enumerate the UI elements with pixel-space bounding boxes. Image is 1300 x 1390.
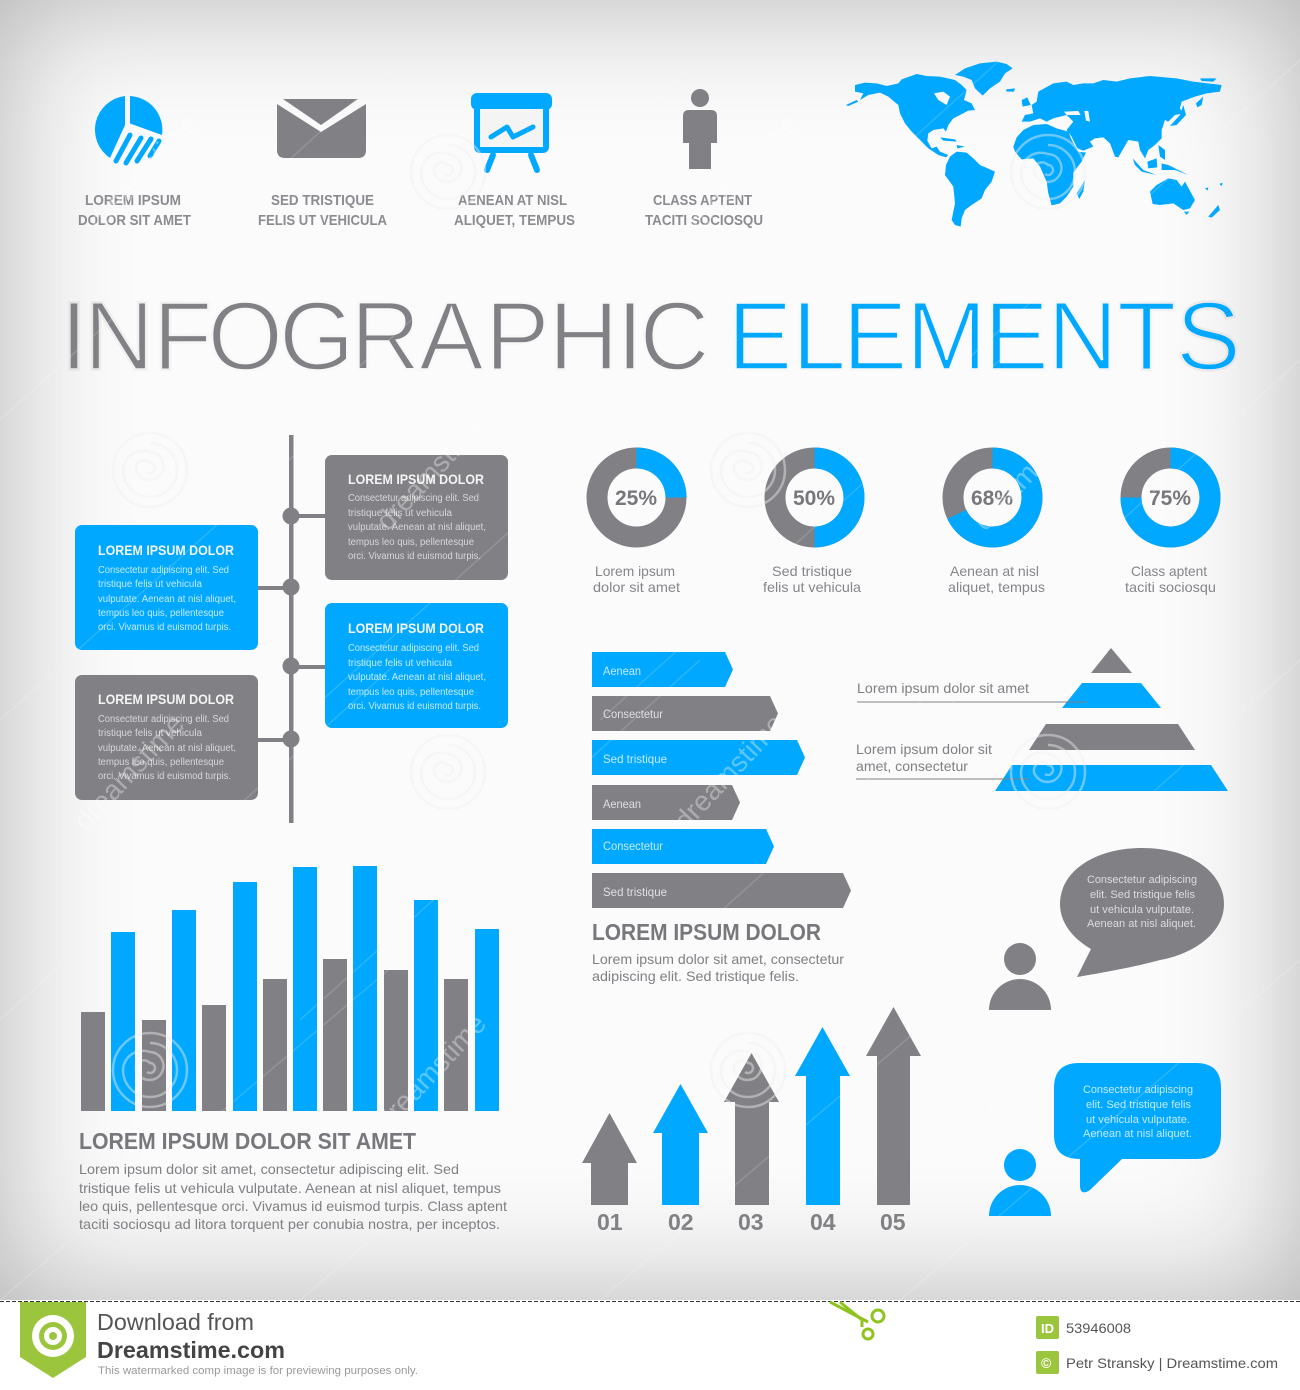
bar: consectetur blue [592, 829, 774, 864]
text: author credit: Petr Stransky | Dreamstime.com [1066, 1355, 1278, 1371]
icon row [78, 89, 763, 229]
text: dreamstime [668, 708, 790, 836]
text: dreamstime [370, 408, 492, 536]
label: aenean: AENEAN AT NISL [458, 192, 567, 209]
label: lorem ipsum: DOLOR SIT AMET [78, 212, 191, 229]
text: bar chart description [79, 1161, 507, 1232]
speech bubble blue [1054, 1063, 1221, 1192]
growth arrows [582, 1007, 921, 1235]
text: dreamstime [68, 708, 190, 836]
speech bubble gray: elit. Sed tristique felis [1090, 889, 1196, 901]
donut 25%: 25% [615, 487, 657, 510]
speech bubble blue: ut vehicula vulputate. [1086, 1114, 1190, 1126]
bar: consectetur gray [592, 696, 778, 731]
panel: blue box right: vulputate. Aenean at nisl aliquet, [348, 672, 486, 683]
footer download text [97, 1309, 418, 1377]
text: dreamstime [682, 108, 804, 236]
panel: gray box left: Consectetur adipiscing elit. Sed [98, 714, 229, 725]
text: bar chart description: Lorem ipsum dolor sit amet, consectetur adipiscing elit. Sed [79, 1161, 459, 1177]
arrow 04: 04 [810, 1209, 836, 1235]
label: lorem ipsum [78, 192, 191, 229]
text: dreamstime [82, 108, 204, 236]
bar: aenean gray [592, 785, 740, 820]
pyramid chart: amet, consectetur [856, 758, 968, 774]
panel: gray box top right: Consectetur adipiscing elit. Sed [348, 493, 479, 504]
arrow 03 [724, 1053, 779, 1235]
bar: consectetur blue: Consectetur [603, 839, 663, 853]
panel: gray box top right: orci. Vivamus id euismod turpis. [348, 551, 481, 562]
donut 25% [593, 448, 686, 595]
panel: blue box right: Consectetur adipiscing elit. Sed [348, 643, 479, 654]
panel: blue box left: LOREM IPSUM DOLOR [98, 542, 234, 558]
text: bar chart description: leo quis, pellentesque orci. Vivamus id euismod turpis. Class aptent [79, 1198, 507, 1214]
arrow 05 [866, 1007, 921, 1235]
label: class aptent: TACITI SOCIOSQU [645, 212, 763, 229]
text: dreamstime [968, 1008, 1090, 1136]
bar: aenean gray: Aenean [603, 797, 641, 811]
panel: blue box right [325, 603, 508, 728]
donut 50% [763, 448, 864, 595]
panel: blue box right: tempus leo quis, pellentesque [348, 687, 474, 698]
title: INFOGRAPHIC [60, 282, 710, 390]
panel: gray box top right: tristique felis ut vehicula [348, 508, 452, 519]
arrow 04 [795, 1027, 850, 1235]
speech bubble blue: elit. Sed tristique felis [1086, 1099, 1192, 1111]
icon: person gray [989, 943, 1051, 1010]
speech bubble gray [1060, 848, 1224, 977]
bar: aenean blue: Aenean [603, 664, 641, 678]
donut 75%: taciti sociosqu [1125, 579, 1216, 595]
donut 68%: 68% [971, 487, 1013, 510]
pyramid chart: Lorem ipsum dolor sit amet [857, 680, 1029, 696]
panel: blue box left: Consectetur adipiscing elit. Sed [98, 565, 229, 576]
text: bar list description: adipiscing elit. Sed tristique felis. [592, 968, 799, 984]
donut 75%: 75% [1149, 487, 1191, 510]
panel: gray box left: tristique felis ut vehicula [98, 728, 202, 739]
donut 50%: Sed tristique [772, 563, 852, 579]
panel: gray box left: LOREM IPSUM DOLOR [98, 691, 234, 707]
speech bubble gray: Aenean at nisl aliquet. [1087, 918, 1196, 930]
arrow bar list [592, 652, 851, 984]
panel: gray box left: vulputate. Aenean at nisl aliquet, [98, 743, 236, 754]
world map [846, 62, 1223, 227]
timeline [75, 435, 508, 823]
bar: sed tristique blue: Sed tristique [603, 752, 667, 766]
panel: gray box top right: vulputate. Aenean at nisl aliquet, [348, 522, 486, 533]
icon: id badge: ID [1041, 1321, 1054, 1336]
arrow 02 [653, 1084, 708, 1235]
label: class aptent: CLASS APTENT [653, 192, 752, 209]
label: lorem ipsum: LOREM IPSUM [85, 192, 181, 209]
icon: person blue [989, 1149, 1051, 1216]
icon: presentation board [471, 93, 552, 170]
panel: blue box left: tristique felis ut vehicula [98, 579, 202, 590]
donut 25%: dolor sit amet [593, 579, 680, 595]
timeline spine and nodes [258, 435, 325, 823]
panel: gray box top right [325, 455, 508, 580]
donut charts [593, 448, 1220, 595]
bar: sed tristique blue [592, 740, 805, 775]
text: image id: 53946008 [1066, 1320, 1131, 1336]
arrow 02: 02 [668, 1209, 694, 1235]
text: dreamstime [967, 408, 1089, 536]
label: sed tristique [258, 192, 387, 229]
speech bubble blue: Aenean at nisl aliquet. [1083, 1128, 1192, 1140]
footer download text: This watermarked comp image is for previewing purposes only. [98, 1365, 418, 1377]
bar: sed tristique gray [592, 873, 851, 908]
text: bar list description: Lorem ipsum dolor sit amet, consectetur [592, 951, 844, 967]
donut 50%: felis ut vehicula [763, 579, 861, 595]
icon: person [683, 89, 717, 169]
icon: envelope [277, 99, 366, 158]
panel: blue box right: orci. Vivamus id euismod turpis. [348, 701, 481, 712]
donut 50%: 50% [793, 487, 835, 510]
speech bubble gray: ut vehicula vulputate. [1090, 904, 1194, 916]
label: sed tristique: FELIS UT VEHICULA [258, 212, 387, 229]
panel: blue box left: orci. Vivamus id euismod turpis. [98, 622, 231, 633]
panel: gray box top right: tempus leo quis, pellentesque [348, 537, 474, 548]
icon: copyright badge: © [1041, 1355, 1052, 1371]
icon: id badge [1036, 1316, 1059, 1339]
label: sed tristique: SED TRISTIQUE [271, 192, 374, 209]
footer download text: Download from [97, 1309, 254, 1335]
speech bubble blue: Consectetur adipiscing [1083, 1084, 1193, 1096]
donut 75% [1120, 448, 1220, 595]
text: bar chart description: taciti sociosqu ad litora torquent per conubia nostra, per inceptos. [79, 1216, 500, 1232]
title: ELEMENTS [728, 282, 1241, 390]
donut 68%: aliquet, tempus [948, 579, 1045, 595]
panel: gray box left: tempus leo quis, pellentesque [98, 757, 224, 768]
panel: blue box left: vulputate. Aenean at nisl aliquet, [98, 594, 236, 605]
arrow 01 [582, 1113, 637, 1235]
speech bubble gray: Consectetur adipiscing [1087, 874, 1197, 886]
panel: gray box left [75, 675, 258, 800]
panel: gray box top right: LOREM IPSUM DOLOR [348, 471, 484, 487]
donut 75%: Class aptent [1131, 563, 1207, 579]
bar chart [81, 866, 499, 1111]
badge: dreamstime logo [20, 1302, 86, 1378]
arrow 03: 03 [738, 1209, 764, 1235]
icon: scissors [830, 1302, 884, 1339]
panel: gray box left: orci. Vivamus id euismod turpis. [98, 771, 231, 782]
heading: bar list: LOREM IPSUM DOLOR [592, 919, 821, 945]
label: aenean: ALIQUET, TEMPUS [454, 212, 575, 229]
donut 68%: Aenean at nisl [950, 563, 1039, 579]
text: bar list description [592, 951, 844, 984]
bar: consectetur gray: Consectetur [603, 707, 663, 721]
label: aenean [454, 192, 575, 229]
text: bar chart description: tristique felis ut vehicula vulputate. Aenean at nisl aliquet, tempus [79, 1180, 501, 1196]
bar: sed tristique gray: Sed tristique [603, 885, 667, 899]
panel: blue box right: LOREM IPSUM DOLOR [348, 620, 484, 636]
pyramid chart [856, 648, 1228, 791]
bar: aenean blue [592, 652, 733, 687]
donut 25%: Lorem ipsum [595, 563, 675, 579]
panel: blue box left: tempus leo quis, pellentesque [98, 608, 224, 619]
arrow 01: 01 [597, 1209, 623, 1235]
footer download text: Dreamstime.com [97, 1337, 285, 1363]
panel: blue box right: tristique felis ut vehicula [348, 658, 452, 669]
label: class aptent [645, 192, 763, 229]
arrow 05: 05 [880, 1209, 906, 1235]
icon: pie chart [95, 96, 162, 163]
footer [0, 1301, 1300, 1390]
panel: blue box left [75, 525, 258, 650]
donut 68% [947, 448, 1045, 595]
text: dreamstime [370, 1008, 492, 1136]
heading: bar chart: LOREM IPSUM DOLOR SIT AMET [79, 1128, 416, 1154]
icon: copyright badge [1036, 1351, 1059, 1374]
pyramid chart: Lorem ipsum dolor sit [856, 741, 992, 757]
title [60, 282, 1241, 390]
